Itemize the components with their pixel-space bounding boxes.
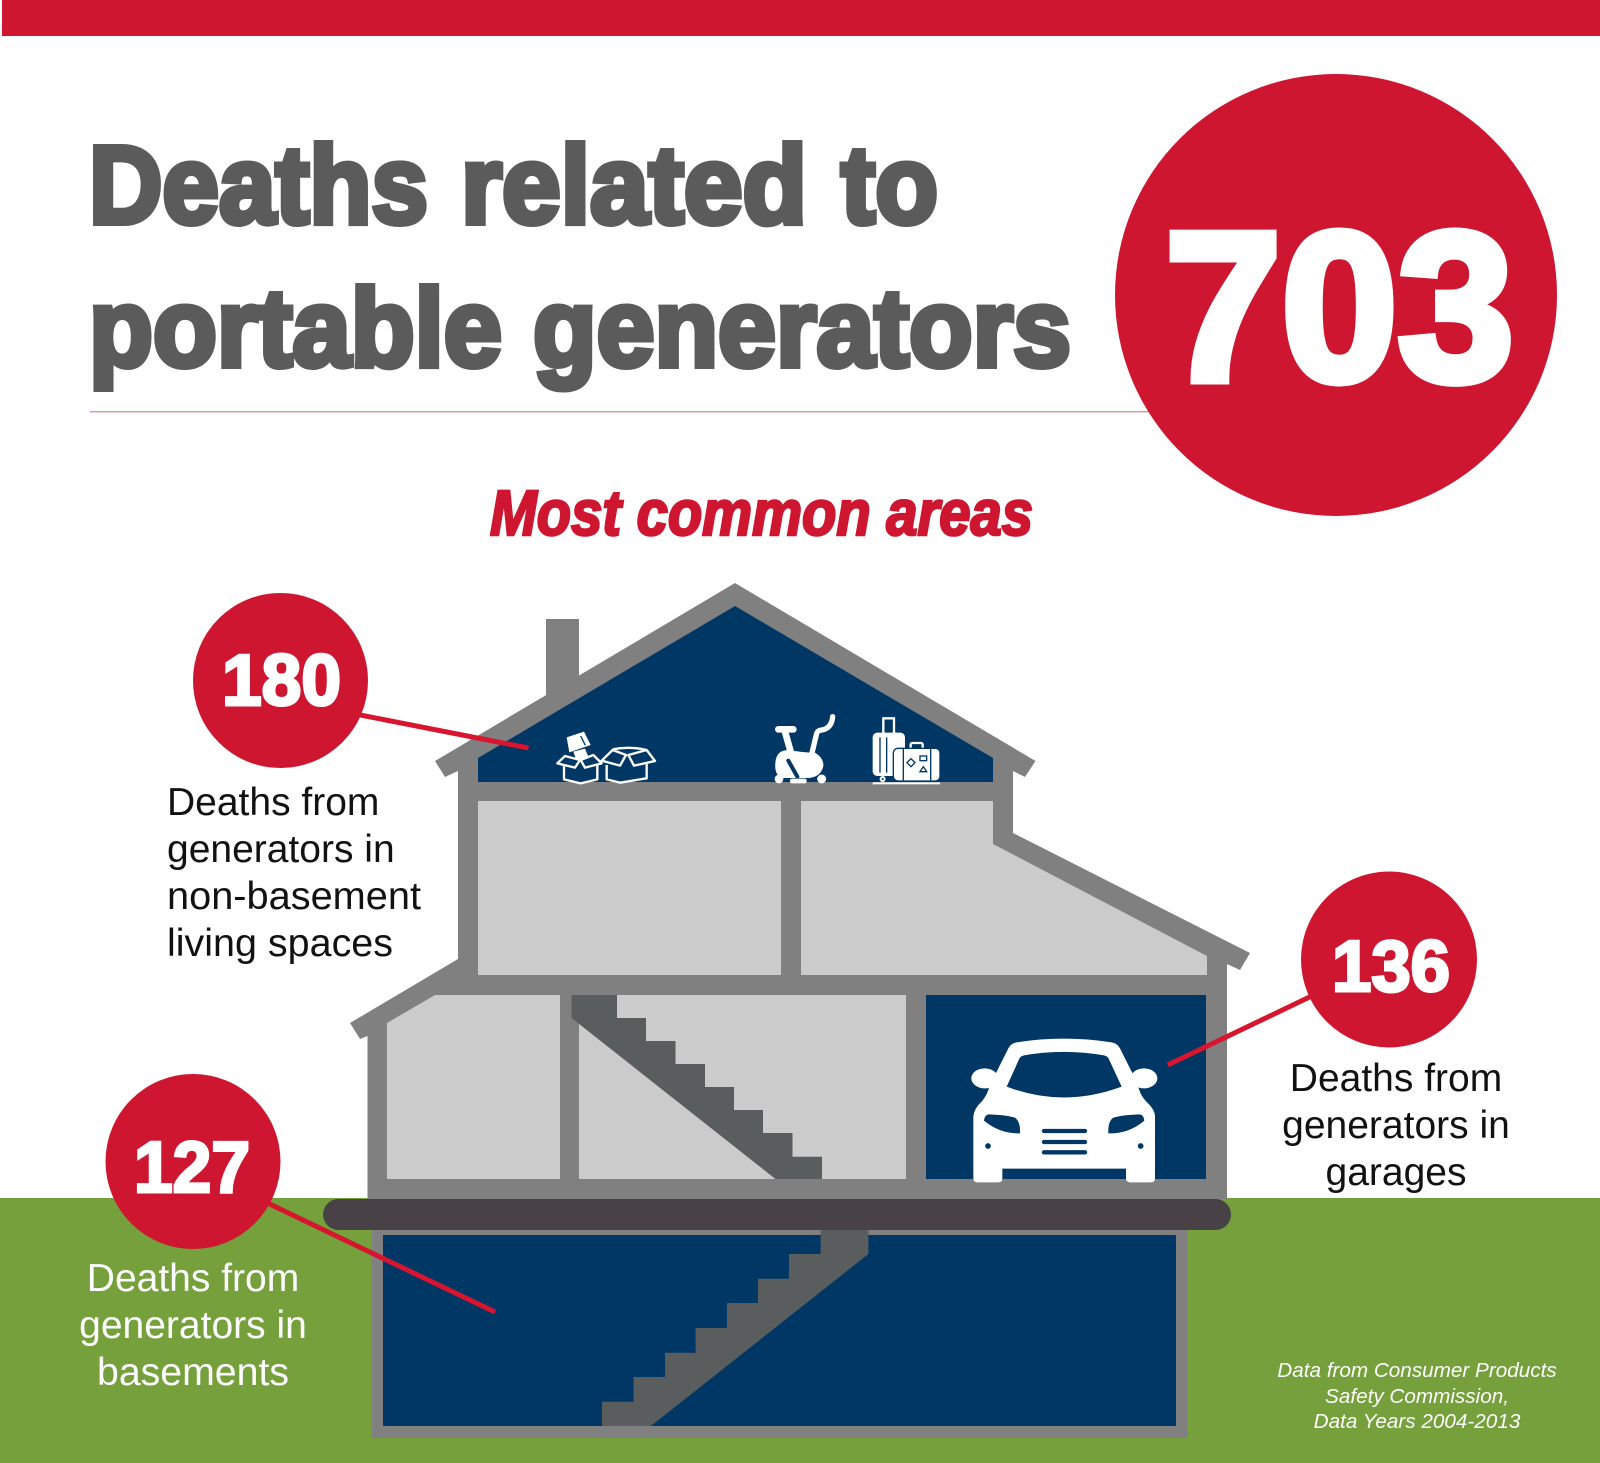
basement [383, 1235, 1176, 1426]
title: generators [533, 267, 1071, 390]
callout: garages: Deaths from [1290, 1057, 1502, 1100]
upper left room [478, 801, 781, 975]
callout: basements: 127 [134, 1128, 250, 1208]
title: related [461, 124, 807, 247]
title: to [841, 124, 938, 247]
callout: garages: garages [1326, 1151, 1466, 1194]
upper right room [801, 801, 1207, 975]
top red bar [2, 0, 1600, 36]
subheading: Most common areas [490, 477, 1033, 549]
callout: non-basement living spaces: non-basement [167, 875, 421, 918]
callout: basements: basements [97, 1351, 289, 1394]
basement stairs [602, 1225, 868, 1426]
icon: boxes [557, 732, 655, 783]
callout: non-basement living spaces: Deaths from [167, 781, 379, 824]
icon: luggage [873, 718, 940, 784]
title: Deaths [89, 124, 428, 247]
callout: basements [79, 1074, 495, 1394]
chimney [546, 619, 579, 704]
icon: exercise bike [775, 717, 833, 783]
floor slab [323, 1199, 1231, 1230]
source note [1277, 1359, 1557, 1433]
total circle: 703 [1115, 74, 1557, 516]
house cross-section [323, 583, 1250, 1438]
source note: Safety Commission, [1325, 1385, 1509, 1408]
callout: garages: 136 [1332, 927, 1450, 1007]
ground [0, 1198, 1600, 1463]
attic [478, 606, 993, 782]
icon: car [971, 1039, 1157, 1182]
title rule [90, 411, 1150, 412]
total circle: 703: 703 [1165, 188, 1514, 425]
callout: non-basement living spaces: living spaces [167, 922, 393, 965]
source note: Data Years 2004-2013 [1314, 1410, 1521, 1433]
title [89, 124, 1071, 390]
garage [926, 995, 1206, 1179]
source note: Data from Consumer Products [1277, 1359, 1557, 1382]
callout: basements: Deaths from [87, 1257, 299, 1300]
callout: garages: generators in [1282, 1104, 1510, 1147]
lower left room [387, 995, 560, 1179]
callout: garages [1168, 872, 1510, 1194]
basement walls [372, 1225, 1188, 1438]
house walls and roof [350, 583, 1250, 1199]
callout: non-basement living spaces: 180 [222, 641, 341, 721]
callout: non-basement living spaces [167, 593, 528, 965]
title: portable [89, 267, 502, 390]
callout: basements: generators in [79, 1304, 307, 1347]
upper stairs [572, 995, 822, 1179]
stair room [579, 995, 906, 1179]
callout: non-basement living spaces: generators in [167, 828, 395, 871]
